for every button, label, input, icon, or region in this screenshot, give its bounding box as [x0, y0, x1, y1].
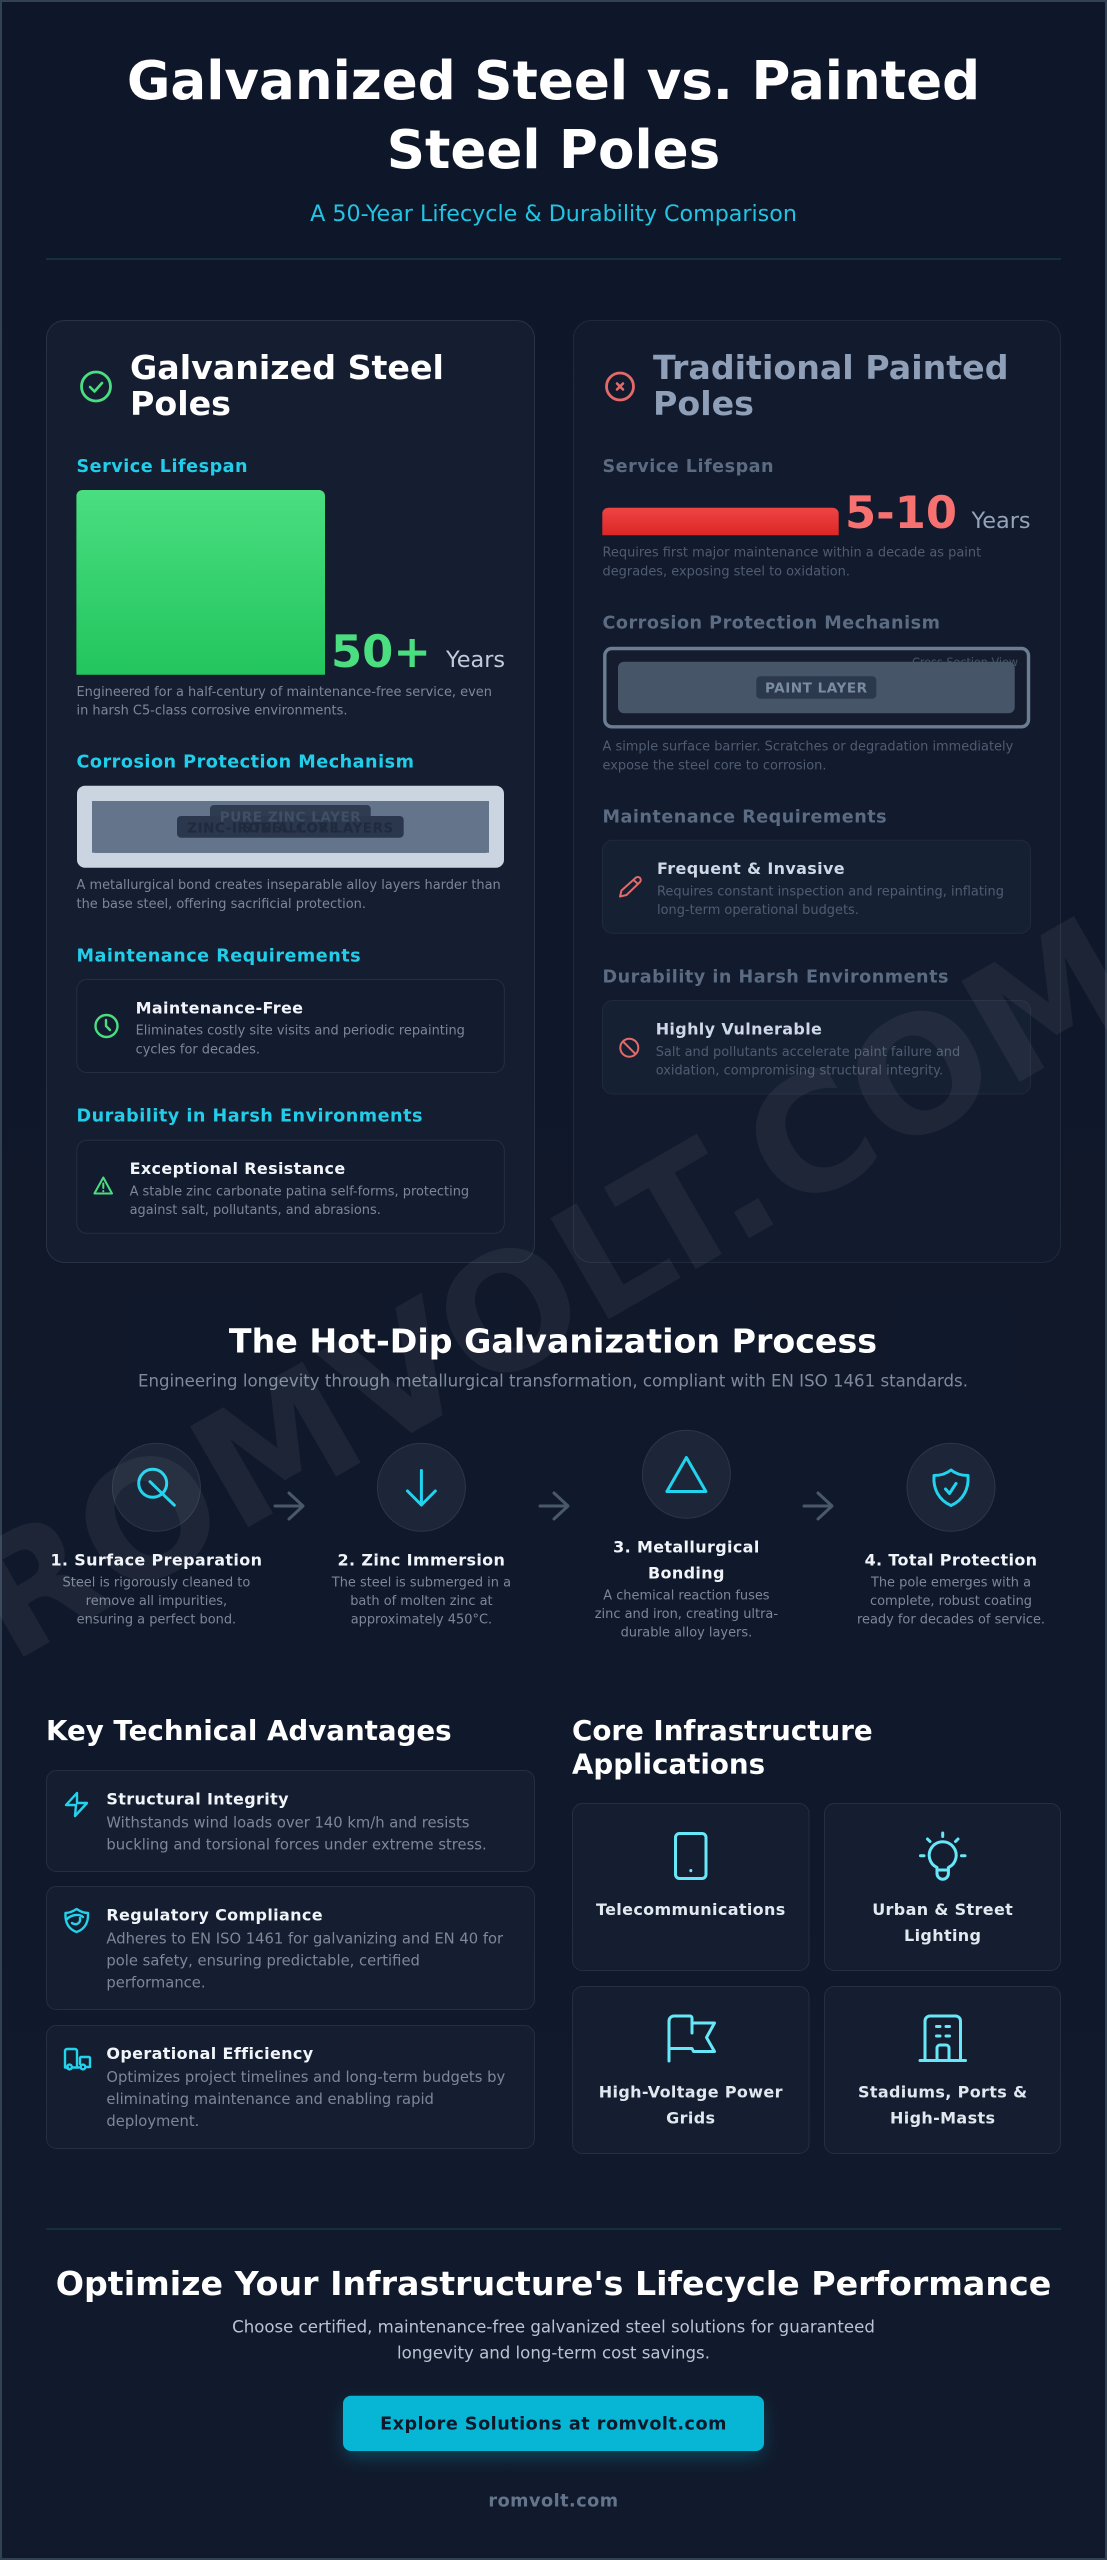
arrow 1 — [275, 1493, 303, 1519]
heading: maintenance: Maintenance Requirements — [602, 808, 887, 828]
card: operational efficiency: Operational Efficiency — [106, 2044, 314, 2063]
card: regulatory compliance: pole safety, ensuring predictable, certified — [106, 1953, 420, 1970]
card: high-voltage power grids: High-Voltage Power — [599, 2083, 783, 2102]
card: structural integrity — [46, 1770, 534, 1872]
card text: A stable zinc carbonate patina self-forms, protecting — [130, 1185, 469, 1200]
mechanism description: A metallurgical bond creates inseparable alloy layers harder than — [76, 878, 501, 893]
section: key technical advantages — [46, 1714, 534, 2148]
icon: warning triangle — [94, 1178, 112, 1194]
icon: pencil — [620, 877, 641, 896]
card text — [136, 998, 465, 1057]
card text — [657, 859, 1004, 918]
subtitle: A 50-Year Lifecycle & Durability Comparison — [310, 201, 797, 227]
heading: durability: Durability in Harsh Environments — [76, 1107, 423, 1127]
card: stadiums, ports and high-masts: High-Masts — [890, 2108, 995, 2127]
diagram: paint cross-section: Cross Section View — [912, 656, 1018, 669]
icon: phone — [676, 1834, 706, 1878]
card: operational efficiency: Optimizes project timelines and long-term budgets by — [106, 2069, 505, 2086]
card text: Salt and pollutants accelerate paint failure and — [656, 1045, 960, 1060]
step 4 — [857, 1443, 1045, 1628]
icon: truck — [65, 2049, 90, 2069]
step 2 — [331, 1443, 511, 1628]
panel heading: Poles — [130, 384, 231, 423]
panel heading: Traditional Painted — [653, 348, 1009, 387]
lifespan description — [76, 685, 492, 719]
card text — [130, 1159, 469, 1218]
footer url: romvolt.com — [488, 2492, 619, 2512]
lifespan description: Engineered for a half-century of maintenance-free service, even — [76, 685, 492, 700]
icon: red x circle — [606, 373, 634, 400]
step 2: approximately 450°C. — [351, 1613, 492, 1628]
card: structural integrity: Withstands wind loads over 140 km/h and resists — [106, 1814, 469, 1831]
diagram: paint cross-section — [605, 648, 1028, 727]
card: exceptional resistance — [77, 1140, 504, 1233]
card: regulatory compliance: performance. — [106, 1975, 206, 1992]
heading — [572, 1714, 873, 1780]
card: regulatory compliance: Regulatory Compliance — [106, 1906, 323, 1925]
title: Galvanized Steel vs. Painted — [127, 50, 980, 112]
card: urban and street lighting — [824, 1804, 1060, 1970]
card: urban and street lighting: Urban & Street — [872, 1900, 1013, 1919]
value: 5-10 years — [845, 486, 1031, 539]
card text: Frequent & Invasive — [657, 859, 845, 878]
step 3: Bonding — [648, 1563, 725, 1582]
step 1: Steel is rigorously cleaned to — [63, 1576, 250, 1591]
section subheading: Engineering longevity through metallurgical transformation, compliant with EN ISO 1461 standards. — [138, 1372, 968, 1391]
icon: magnifier — [139, 1469, 174, 1505]
step 1: 1. Surface Preparation — [50, 1551, 262, 1570]
cta text — [232, 2317, 875, 2362]
icon: shield check — [934, 1470, 968, 1506]
step 2: 2. Zinc Immersion — [338, 1551, 505, 1570]
card text: Highly Vulnerable — [656, 1020, 822, 1039]
lifespan description: degrades, exposing steel to oxidation. — [602, 564, 850, 579]
panel heading — [130, 348, 444, 423]
card: high-voltage power grids — [572, 1986, 809, 2154]
value: 50+ years: 50+ — [331, 625, 431, 678]
card: telecommunications — [572, 1804, 809, 1970]
panel: traditional painted poles — [574, 320, 1060, 1262]
mechanism description: A simple surface barrier. Scratches or degradation immediately — [602, 740, 1014, 755]
card: regulatory compliance — [46, 1886, 534, 2010]
step 2: The steel is submerged in a — [331, 1576, 511, 1591]
heading: service lifespan: Service Lifespan — [602, 457, 774, 477]
card: structural integrity: Structural Integrity — [106, 1789, 289, 1808]
icon: green check circle — [82, 372, 110, 401]
title — [127, 50, 980, 181]
card: maintenance-free — [77, 980, 504, 1072]
lifespan description — [602, 546, 981, 579]
panel heading: Galvanized Steel — [130, 348, 444, 387]
mechanism description — [76, 878, 501, 912]
icon: clock — [96, 1015, 118, 1037]
icon: shield — [65, 1909, 88, 1932]
value: 5-10 years: Years — [970, 508, 1031, 534]
card: telecommunications: Telecommunications — [596, 1900, 786, 1919]
heading: corrosion protection: Corrosion Protection Mechanism — [602, 613, 940, 633]
card: stadiums, ports and high-masts — [824, 1986, 1060, 2154]
arrow 2 — [540, 1493, 568, 1519]
section heading: The Hot-Dip Galvanization Process — [229, 1322, 877, 1361]
card: operational efficiency — [46, 2026, 534, 2148]
icon: arrow down — [408, 1470, 435, 1505]
icon: bolt — [66, 1793, 87, 1816]
heading: corrosion protection: Corrosion Protection Mechanism — [76, 753, 414, 773]
cta text: Choose certified, maintenance-free galvanized steel solutions for guaranteed — [232, 2317, 875, 2336]
card: urban and street lighting: Lighting — [904, 1926, 981, 1945]
call to action — [56, 2264, 1051, 2512]
button: explore solutions — [343, 2396, 764, 2456]
step 2: bath of molten zinc at — [350, 1594, 493, 1609]
diagram: zinc cross-section: PURE ZINC LAYER — [220, 810, 361, 826]
step 4: complete, robust coating — [870, 1594, 1032, 1609]
step 1 — [50, 1443, 262, 1628]
card text: Eliminates costly site visits and periodic repainting — [136, 1024, 465, 1039]
icon: building — [920, 2016, 966, 2060]
heading: Key Technical Advantages — [46, 1714, 452, 1747]
step 3: durable alloy layers. — [621, 1625, 752, 1640]
card text: against salt, pollutants, and abrasions. — [130, 1203, 381, 1218]
header — [127, 50, 980, 227]
panel: galvanized steel poles — [46, 320, 534, 1262]
section: hot-dip galvanization process — [50, 1322, 1045, 1640]
step 4: The pole emerges with a — [870, 1576, 1031, 1591]
heading: durability: Durability in Harsh Environments — [602, 968, 949, 988]
card text: oxidation, compromising structural integrity. — [656, 1064, 943, 1079]
card text: Exceptional Resistance — [130, 1159, 346, 1178]
heading: service lifespan: Service Lifespan — [76, 457, 248, 477]
card: frequent and invasive — [602, 840, 1030, 933]
step 3: A chemical reaction fuses — [603, 1588, 770, 1603]
cta heading: Optimize Your Infrastructure's Lifecycle Performance — [56, 2264, 1051, 2303]
mechanism description — [602, 740, 1014, 773]
step 1: remove all impurities, — [86, 1594, 227, 1609]
card: highly vulnerable — [602, 1000, 1030, 1094]
icon: triangle — [667, 1458, 706, 1492]
value: 50+ years — [331, 625, 505, 678]
step 1: ensuring a perfect bond. — [77, 1613, 236, 1628]
button: explore solutions: Explore Solutions at romvolt.com — [380, 2414, 727, 2434]
diagram: zinc cross-section — [77, 786, 504, 868]
card: operational efficiency: eliminating maintenance and enabling rapid — [106, 2091, 434, 2108]
card text: Requires constant inspection and repainting, inflating — [657, 884, 1004, 899]
mechanism description: expose the steel core to corrosion. — [602, 758, 826, 773]
icon: ban — [620, 1039, 638, 1057]
arrow 3 — [804, 1493, 832, 1519]
heading: Core Infrastructure — [572, 1714, 873, 1747]
bar: 50+ years — [76, 490, 325, 675]
bar: 5-10 years — [602, 508, 839, 535]
step 3: zinc and iron, creating ultra- — [595, 1607, 778, 1622]
card text: long-term operational budgets. — [657, 903, 859, 918]
card: high-voltage power grids: Grids — [666, 2108, 715, 2127]
card: structural integrity: buckling and torsional forces under extreme stress. — [106, 1836, 487, 1853]
value: 50+ years: Years — [445, 647, 505, 673]
step 3: 3. Metallurgical — [613, 1537, 760, 1556]
card text: cycles for decades. — [136, 1042, 260, 1057]
card: operational efficiency: deployment. — [106, 2113, 199, 2130]
cta text: longevity and long-term cost savings. — [397, 2343, 710, 2362]
value: 5-10 years: 5-10 — [845, 486, 957, 539]
heading: Applications — [572, 1747, 765, 1780]
card: regulatory compliance: Adheres to EN ISO 1461 for galvanizing and EN 40 for — [106, 1931, 504, 1948]
diagram: paint cross-section: PAINT LAYER — [765, 680, 868, 696]
icon: flag — [669, 2016, 714, 2061]
panel heading: Poles — [653, 384, 754, 423]
panel heading — [653, 348, 1009, 423]
diagram: zinc cross-section: STEEL CORE — [242, 820, 339, 836]
mechanism description: the base steel, offering sacrificial protection. — [76, 897, 366, 912]
icon: light bulb — [920, 1833, 965, 1879]
card text — [656, 1020, 960, 1079]
section: core infrastructure applications — [572, 1714, 1060, 2154]
card: stadiums, ports and high-masts: Stadiums, Ports & — [858, 2083, 1027, 2102]
diagram: zinc cross-section: ZINC-IRON ALLOY LAYERS — [187, 820, 394, 836]
lifespan description: in harsh C5-class corrosive environments. — [76, 704, 347, 719]
step 3 — [595, 1430, 778, 1640]
title: Steel Poles — [387, 119, 720, 181]
step 4: 4. Total Protection — [865, 1551, 1037, 1570]
heading: maintenance: Maintenance Requirements — [76, 946, 361, 966]
lifespan description: Requires first major maintenance within a decade as paint — [602, 546, 981, 561]
card text: Maintenance-Free — [136, 998, 303, 1017]
step 4: ready for decades of service. — [857, 1613, 1045, 1628]
